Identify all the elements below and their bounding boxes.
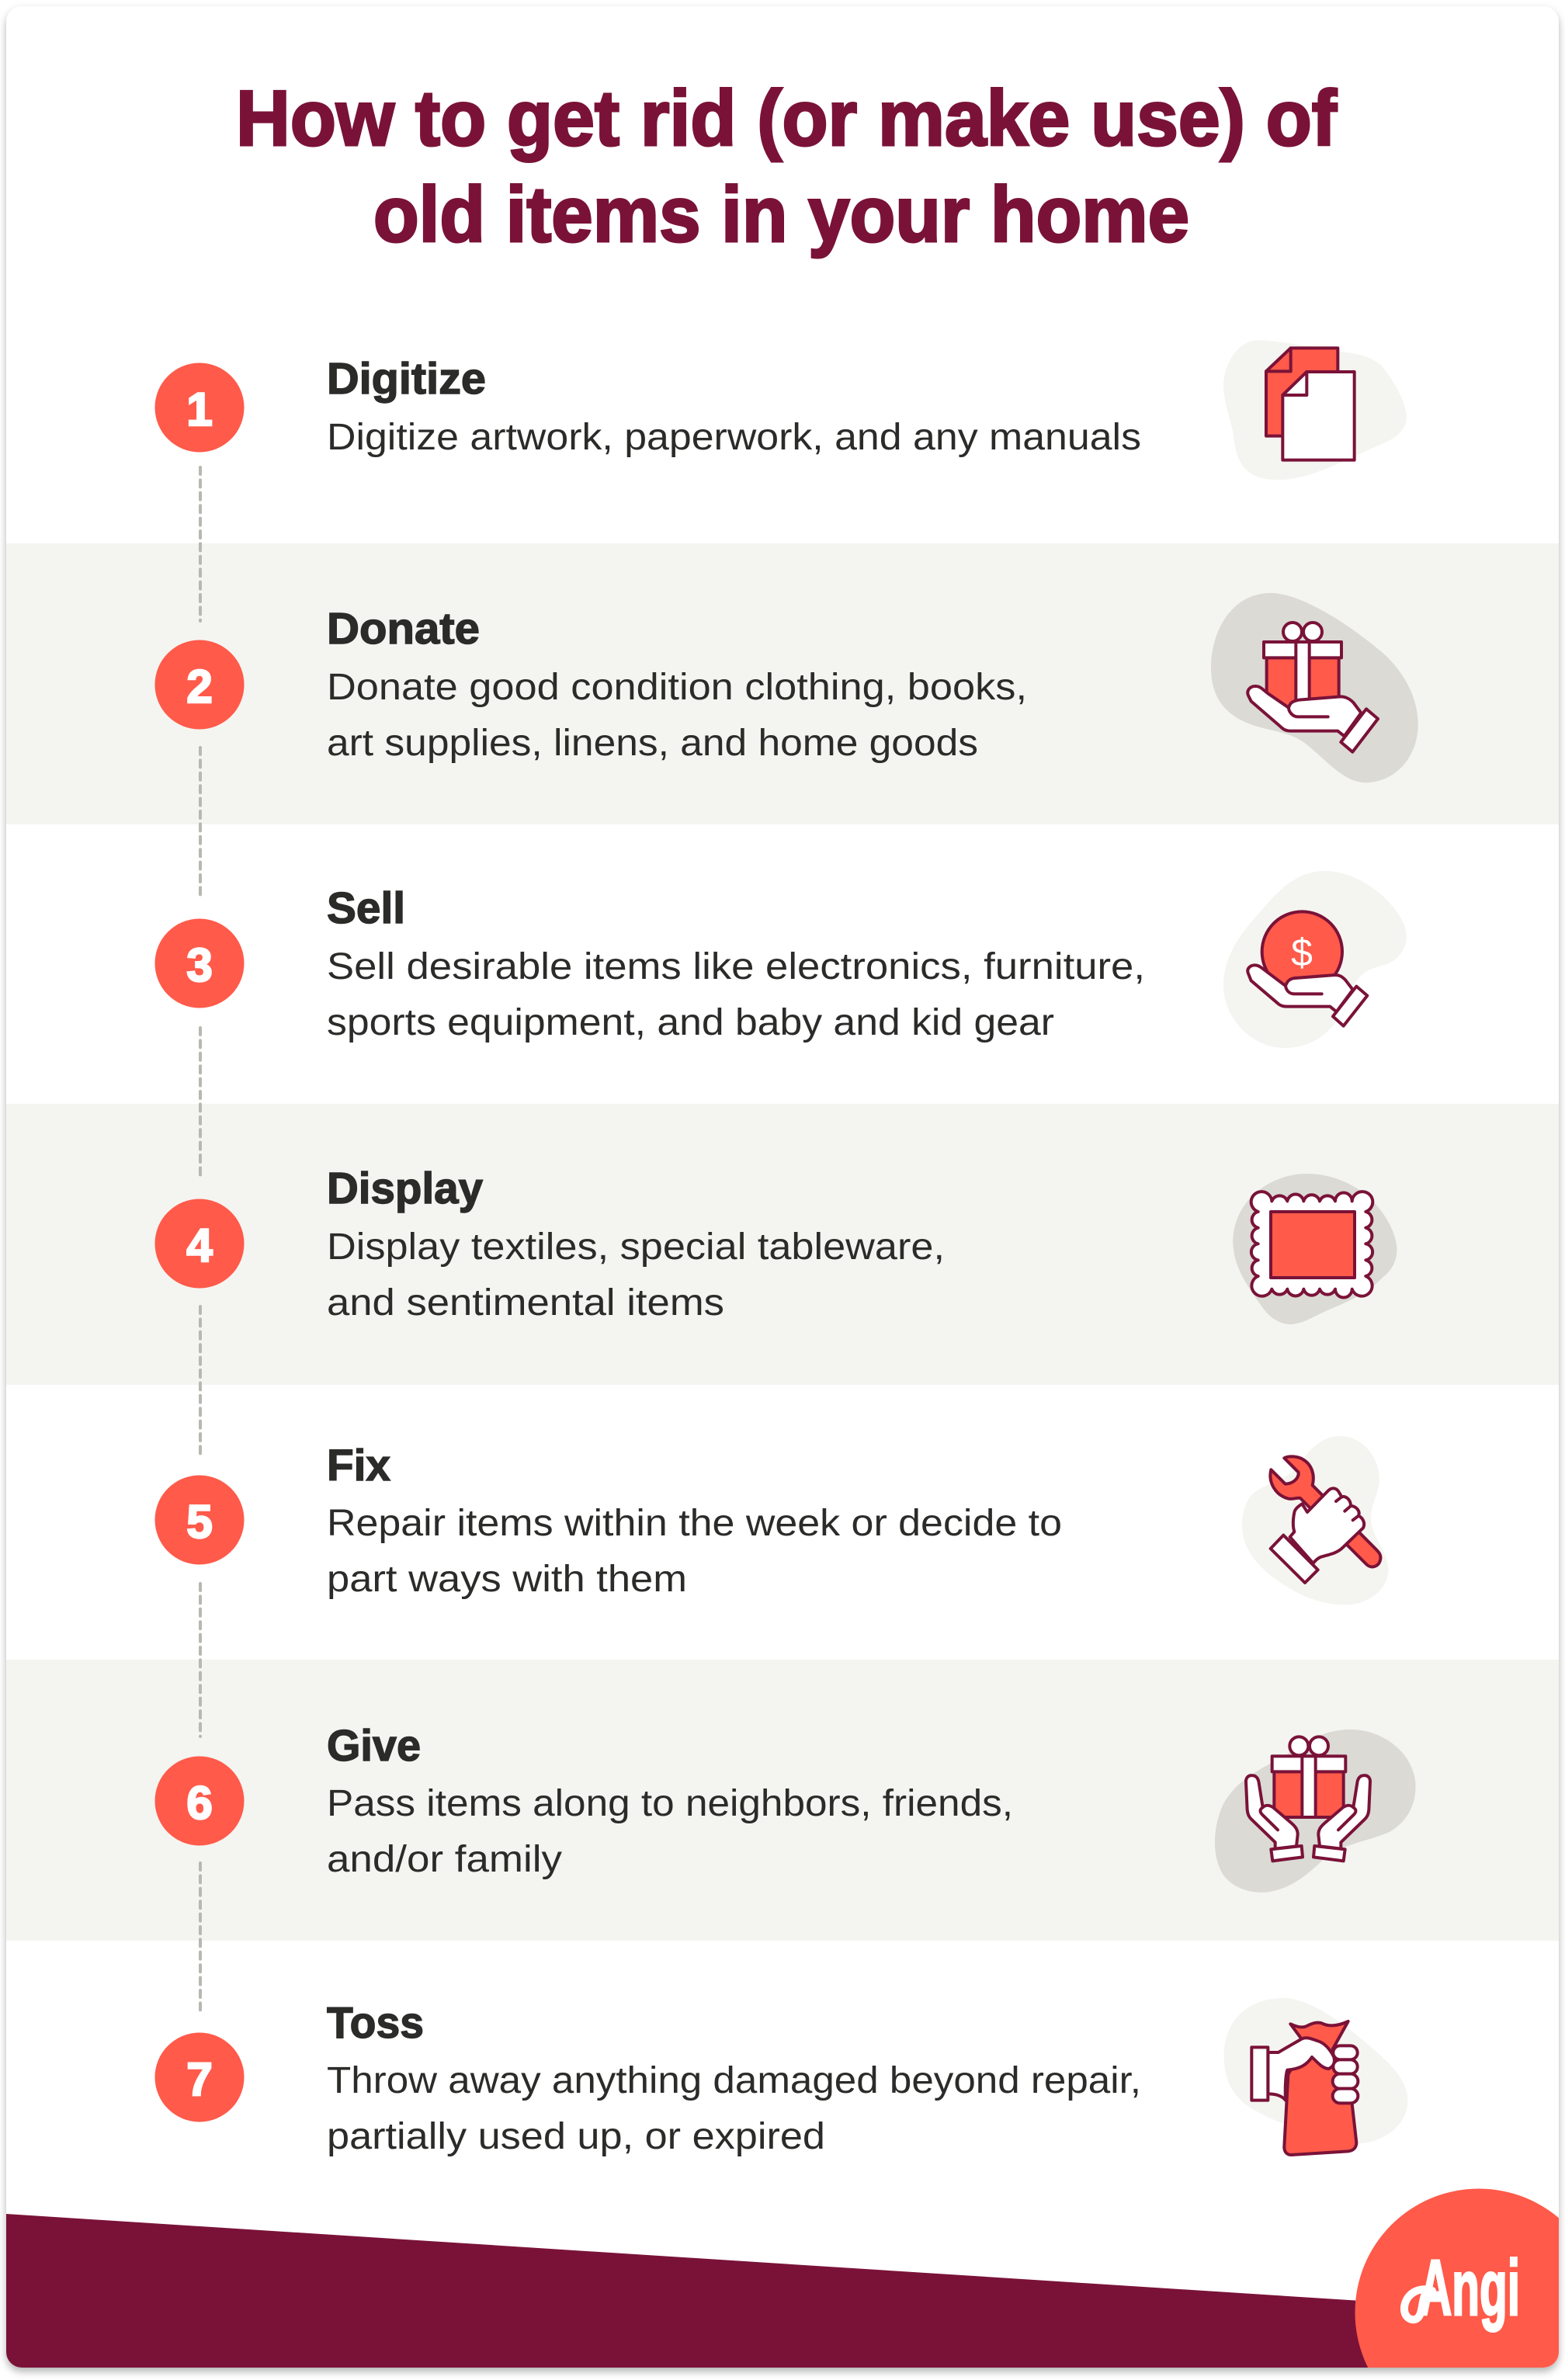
number badge 4: 4 [186, 1219, 213, 1272]
icon: coin on a hand [1223, 871, 1407, 1048]
icon: gift on a hand [1211, 593, 1418, 782]
heading: Give: Give [327, 1721, 421, 1771]
number badge 2: 2 [186, 661, 213, 713]
number badge 7 [155, 2032, 244, 2122]
heading: Toss: Toss [327, 1998, 424, 2048]
number badge 1 [155, 363, 244, 452]
number badge 2 [155, 640, 244, 730]
panel: step 7 toss [6, 1941, 1559, 2212]
number badge 3 [155, 919, 244, 1008]
heading: Display: Display [327, 1164, 483, 1213]
heading: Fix: Fix [327, 1441, 390, 1490]
logo: Angi [1355, 2189, 1565, 2380]
panel: step 1 digitize [155, 340, 1407, 480]
description: Toss: partially used up, or expired [327, 2116, 825, 2157]
panel: step 6 give [6, 1660, 1559, 1941]
icon: scalloped frame [1233, 1174, 1397, 1324]
description: Display [328, 1232, 941, 1315]
icon: coin on a hand: $ [1291, 931, 1313, 974]
description: Display: and sentimental items [327, 1282, 724, 1324]
description: Fix: part ways with them [327, 1559, 687, 1600]
number badge 3: 3 [186, 939, 213, 991]
panel: step 3 sell [155, 871, 1407, 1048]
number badge 4 [155, 1199, 244, 1289]
panel: step 2 donate [6, 543, 1559, 824]
heading: Sell: Sell [327, 883, 405, 933]
number badge 6: 6 [186, 1777, 213, 1829]
title: old items in your home [373, 172, 1189, 258]
description: Fix [327, 1503, 1062, 1600]
description: Donate: art supplies, linens, and home goods [327, 723, 978, 764]
description: Give [327, 1783, 1013, 1880]
description: Fix: Repair items within the week or decide to [327, 1503, 1062, 1544]
panel: step 5 fix [155, 1436, 1388, 1605]
number badge 5: 5 [186, 1496, 213, 1548]
icon: hand holding trash bag [1224, 1998, 1407, 2155]
title [236, 75, 1337, 258]
description: Sell [327, 946, 1145, 1043]
description: Toss: Throw away anything damaged beyond repair, [327, 2060, 1141, 2101]
description: Give: Pass items along to neighbors, friends, [327, 1783, 1013, 1824]
connector: dashed timeline [199, 467, 202, 2015]
icon: documents [1223, 340, 1407, 480]
description: Give: and/or family [327, 1839, 562, 1880]
icon: gift between two hands [1215, 1729, 1415, 1893]
heading: Digitize: Digitize [327, 354, 486, 404]
description: Donate: Donate good condition clothing, books, [327, 667, 1027, 708]
description: Sell: Sell desirable items like electronics, furniture, [327, 946, 1145, 987]
footer band [6, 2214, 1397, 2368]
description: Toss [327, 2060, 1141, 2157]
number badge 7: 7 [186, 2053, 213, 2105]
description: Display: Display textiles, special tableware, [327, 1226, 945, 1268]
icon: hand holding wrench [1242, 1436, 1388, 1605]
panel: step 4 display [6, 1104, 1559, 1385]
description: Donate [327, 667, 1027, 764]
number badge 6 [155, 1756, 244, 1846]
description: Sell: sports equipment, and baby and kid gear [327, 1002, 1054, 1043]
title: How to get rid (or make use) of [236, 75, 1337, 162]
number badge 5 [155, 1475, 244, 1565]
description: Digitize: Digitize artwork, paperwork, and any manuals [327, 417, 1141, 458]
heading: Donate: Donate [327, 604, 480, 654]
number badge 1: 1 [186, 383, 213, 435]
